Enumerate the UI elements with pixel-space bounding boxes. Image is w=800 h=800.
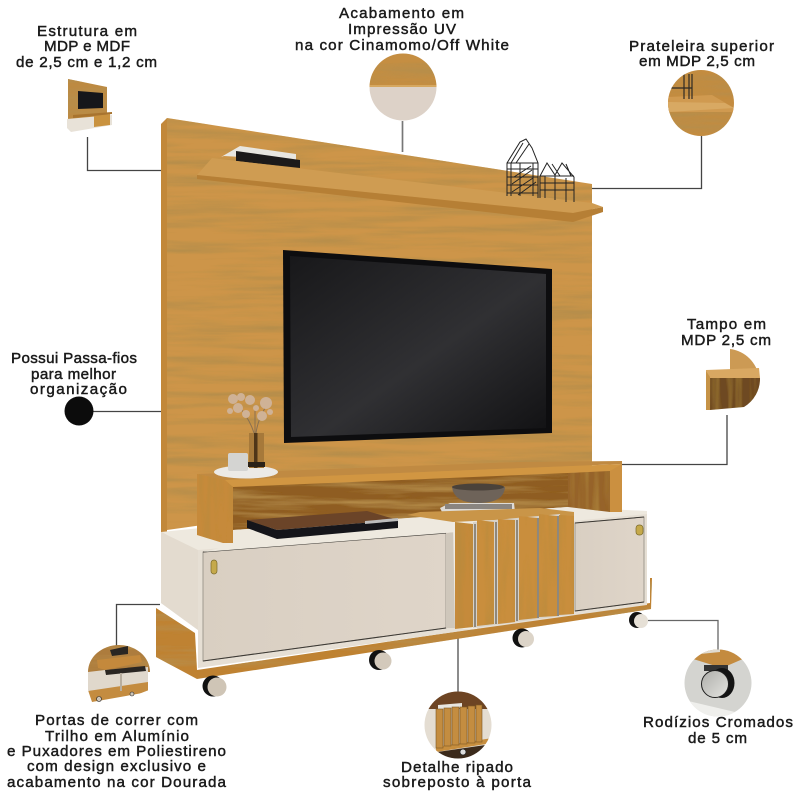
upper shelf	[197, 158, 603, 222]
interior back of the niche	[223, 472, 568, 530]
text: Portas de correr: acabamento na cor Dourada	[7, 774, 227, 791]
text: Detalhe ripado: Detalhe ripado	[401, 759, 513, 776]
TV	[283, 250, 552, 443]
text: Passa-fios: Possui Passa-fios	[11, 350, 137, 367]
door pull gold	[636, 525, 643, 535]
text: Estrutura: de 2,5 cm e 1,2 cm	[16, 54, 157, 71]
text: Detalhe ripado	[383, 759, 532, 791]
books on shelf	[221, 146, 300, 168]
text: Rodízios	[643, 714, 793, 747]
small sliding door	[575, 517, 644, 611]
text: Rodízios: Rodízios Cromados	[643, 714, 793, 731]
text: Portas de correr: e Puxadores em Poliestireno	[7, 743, 226, 760]
text: Passa-fios: para melhor	[31, 366, 116, 383]
icon: caster wheel detail circle	[684, 648, 752, 718]
wooden slats	[407, 508, 574, 629]
bowl and books	[440, 484, 515, 518]
text: Portas de correr: Trilho em Alumínio	[45, 728, 189, 745]
text: Estrutura: Estrutura em	[37, 23, 137, 40]
DVD player	[247, 511, 398, 539]
icon: table top detail	[706, 349, 760, 410]
icon: black cable hole dot	[64, 396, 94, 426]
text: Detalhe ripado: sobreposto à porta	[383, 774, 532, 791]
caster wheels	[202, 612, 648, 696]
large sliding door	[203, 532, 455, 661]
icon: thumbnail of full furniture	[67, 79, 112, 132]
text: Passa-fios	[11, 350, 137, 398]
console top and legs	[197, 461, 622, 543]
text: Estrutura	[16, 23, 157, 71]
text: Acabamento: na cor Cinamomo/Off White	[295, 37, 509, 54]
text: Prateleira: em MDP 2,5 cm	[639, 53, 755, 70]
wire house ornaments	[507, 139, 574, 202]
wood base	[156, 578, 652, 679]
text: Acabamento	[295, 5, 509, 54]
text: Prateleira: Prateleira superior	[629, 38, 774, 55]
text: Portas de correr: Portas de correr com	[35, 712, 198, 729]
text: Portas de correr	[7, 712, 227, 791]
back panel	[161, 118, 592, 535]
text: Portas de correr: com design exclusivo e	[27, 758, 206, 775]
text: Tampo	[681, 316, 771, 349]
text: Acabamento: Impressão UV	[348, 21, 457, 38]
text: Tampo: Tampo em	[687, 316, 766, 333]
icon: finish swatch circle	[369, 53, 437, 122]
door pull gold	[211, 560, 217, 574]
text: Prateleira	[629, 38, 774, 70]
text: Estrutura: MDP e MDF	[44, 38, 130, 55]
niche floor	[203, 507, 647, 552]
decor: plate, mug, vase and dried flowers	[214, 393, 278, 478]
connector lines	[88, 121, 727, 692]
text: Passa-fios: organização	[30, 381, 127, 398]
icon: slatted door detail circle	[424, 691, 492, 760]
off-white cabinet body	[161, 508, 647, 668]
icon: sliding doors detail circle	[86, 644, 152, 702]
icon: upper shelf detail circle	[668, 70, 734, 137]
text: Tampo: MDP 2,5 cm	[681, 332, 771, 349]
furniture: TV stand with back panel	[156, 118, 652, 696]
text: Acabamento: Acabamento em	[339, 5, 464, 22]
text: Rodízios: de 5 cm	[688, 730, 747, 747]
